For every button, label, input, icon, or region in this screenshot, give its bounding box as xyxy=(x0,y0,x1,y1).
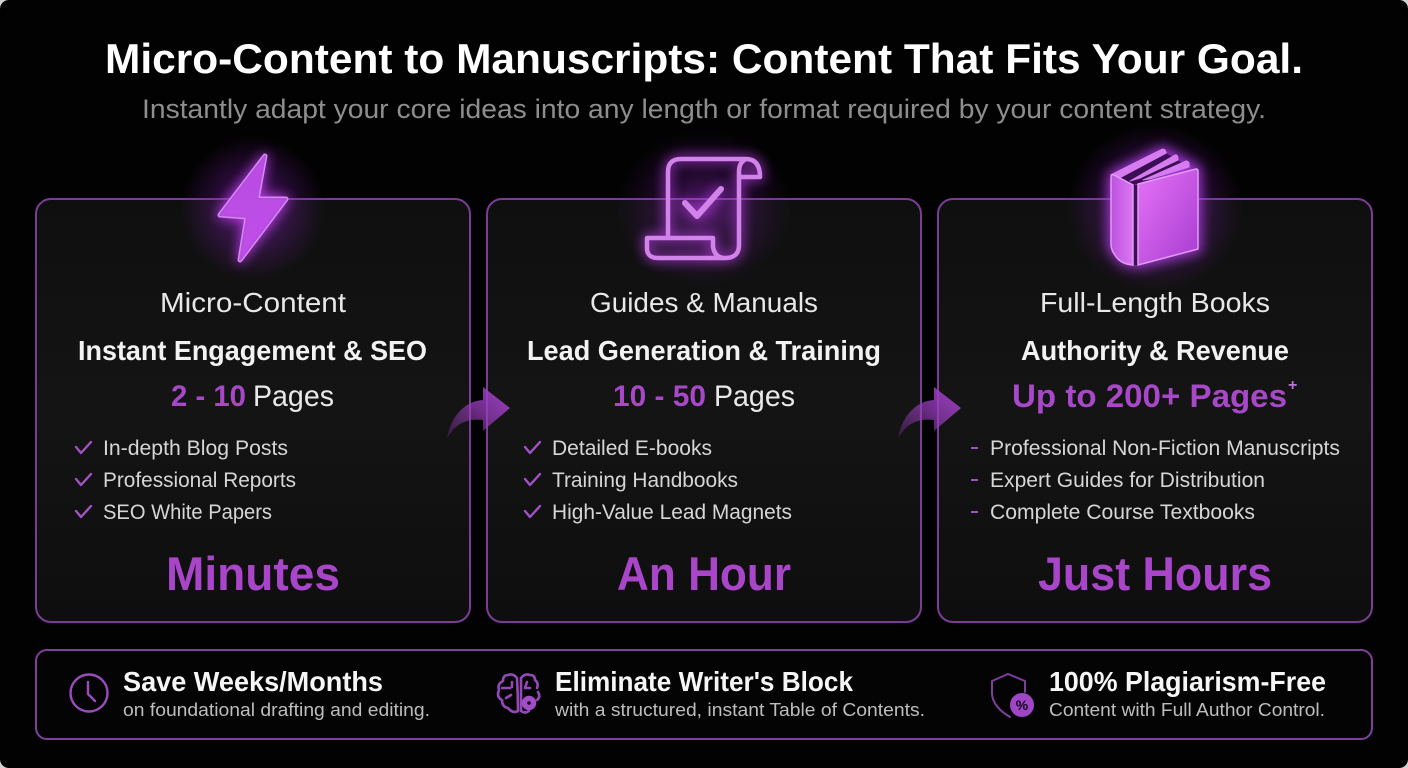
icon halo xyxy=(1067,124,1243,292)
icon: scroll with check xyxy=(647,159,760,258)
benefit: save time: on foundational drafting and editing. xyxy=(123,699,430,720)
feature list: Detailed E-books xyxy=(552,436,712,460)
page range: 2 - 10 xyxy=(171,380,246,413)
icon halo xyxy=(181,136,325,280)
card heading: Micro-Content xyxy=(160,287,346,318)
feature list: In-depth Blog Posts xyxy=(103,436,288,460)
feature list: High-Value Lead Magnets xyxy=(552,500,792,524)
panel: benefits bar xyxy=(36,650,1372,739)
page range: Pages xyxy=(253,380,334,413)
panel: guides and manuals xyxy=(487,130,921,622)
icon: shield with percent xyxy=(992,674,1034,717)
page range: 10 - 50 xyxy=(613,380,706,413)
benefit: save time xyxy=(123,666,430,720)
time label: Just Hours xyxy=(1038,547,1272,600)
panel: micro-content xyxy=(36,136,470,622)
feature list xyxy=(971,436,1340,524)
arrow: first to second card xyxy=(447,387,510,439)
title: Micro-Content to Manuscripts: Content That Fits Your Goal. xyxy=(105,35,1303,82)
feature list: Complete Course Textbooks xyxy=(990,500,1255,524)
page range: Pages xyxy=(714,380,795,413)
icon: book xyxy=(1111,149,1198,265)
icon: lightning bolt xyxy=(220,156,286,260)
feature list xyxy=(525,436,792,524)
feature list: SEO White Papers xyxy=(103,500,272,524)
card frame xyxy=(487,199,921,622)
card heading: Guides & Manuals xyxy=(590,287,818,318)
feature list: Expert Guides for Distribution xyxy=(990,468,1265,492)
benefit: plagiarism-free: Content with Full Author Control. xyxy=(1049,699,1325,720)
page range xyxy=(171,380,334,413)
feature list xyxy=(76,436,296,524)
benefit: writer's block: Eliminate Writer's Block xyxy=(555,666,854,697)
feature list: Professional Non-Fiction Manuscripts xyxy=(990,436,1340,460)
card subheading: Lead Generation & Training xyxy=(527,335,881,366)
page range: Up to 200+ Pages xyxy=(1012,378,1287,414)
benefit: plagiarism-free xyxy=(1049,666,1326,720)
benefit: writer's block: with a structured, instant Table of Contents. xyxy=(554,699,925,720)
icon: brain xyxy=(498,674,539,712)
page range: + xyxy=(1288,377,1297,394)
arrow: second to third card xyxy=(898,387,961,439)
time label: Minutes xyxy=(166,547,340,600)
card frame xyxy=(36,199,470,622)
card frame xyxy=(938,199,1372,622)
panel: full-length books xyxy=(938,124,1372,622)
feature list: Training Handbooks xyxy=(552,468,738,492)
icon: shield with percent: % xyxy=(1016,697,1029,713)
page range xyxy=(613,380,795,413)
feature list: Professional Reports xyxy=(103,468,296,492)
subtitle: Instantly adapt your core ideas into any length or format required by your content strategy. xyxy=(142,94,1266,124)
card subheading: Instant Engagement & SEO xyxy=(78,335,427,366)
card heading: Full-Length Books xyxy=(1040,287,1270,318)
bar frame xyxy=(36,650,1372,739)
icon: clock xyxy=(70,674,108,712)
time label: An Hour xyxy=(617,547,791,600)
benefit: writer's block xyxy=(554,666,925,720)
icon halo xyxy=(616,130,792,286)
benefit: save time: Save Weeks/Months xyxy=(123,666,383,697)
card subheading: Authority & Revenue xyxy=(1021,335,1289,366)
benefit: plagiarism-free: 100% Plagiarism-Free xyxy=(1049,666,1326,697)
